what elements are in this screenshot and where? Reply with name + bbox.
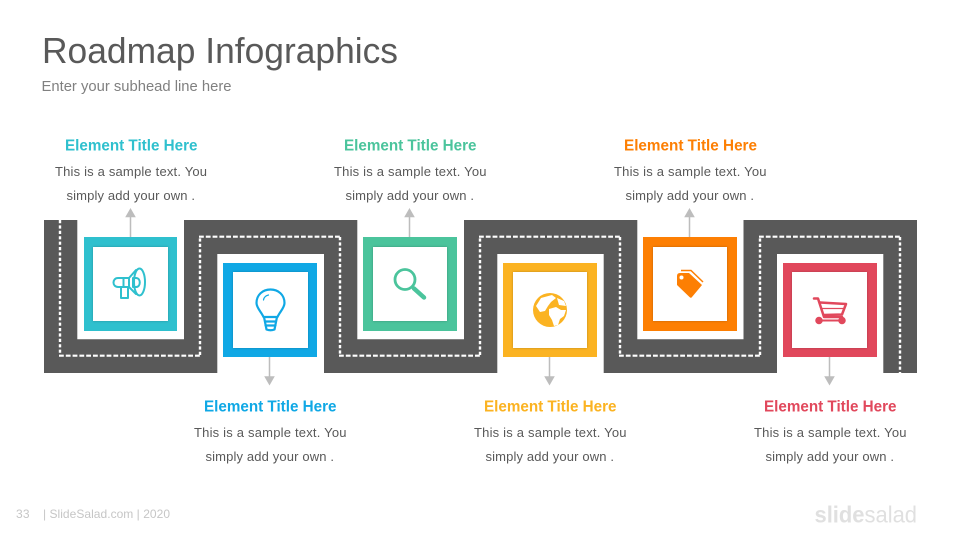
step 4: title: Element Title Here: [484, 398, 617, 416]
step 1: description: simply add your own .: [66, 188, 195, 203]
step 5: title: Element Title Here: [624, 138, 757, 154]
step 6: title: Element Title Here: [764, 398, 897, 416]
icon: price tag: [677, 270, 703, 298]
icon: globe: [533, 293, 567, 327]
icon: magnifying glass: [395, 270, 424, 298]
logo: slidesalad: slidesalad: [814, 502, 917, 528]
step 4: description: This is a sample text. You: [474, 425, 626, 440]
step 1: description: This is a sample text. You: [55, 164, 207, 179]
icon: light bulb: [256, 290, 284, 330]
step 3: description: This is a sample text. You: [334, 164, 486, 179]
roadmap road: [44, 220, 917, 373]
step 4: description: simply add your own .: [486, 449, 614, 464]
step 1: arrow up: [126, 210, 134, 237]
step 3: arrow up: [406, 210, 414, 237]
step 5: description: simply add your own .: [626, 188, 754, 203]
step 5: description: [614, 164, 766, 203]
step 3: description: [334, 164, 486, 203]
title: Roadmap Infographics: [42, 30, 398, 71]
step 2: blue square: [223, 263, 317, 357]
step 4: arrow down: [546, 357, 554, 384]
step 3: description: simply add your own .: [346, 188, 474, 203]
step 6: red square: [783, 263, 877, 357]
step 6: arrow down: [826, 357, 834, 384]
step 1: teal square: [84, 237, 177, 331]
footer: source: | SlideSalad.com | 2020: [43, 507, 170, 521]
step 6: description: This is a sample text. You: [754, 425, 906, 440]
step 5: arrow up: [686, 210, 694, 237]
icon: shopping cart: [814, 298, 846, 323]
step 1: title: Element Title Here: [65, 138, 198, 154]
step 5: description: This is a sample text. You: [614, 164, 766, 179]
step 4: yellow square: [503, 263, 597, 357]
step 3: title: Element Title Here: [344, 138, 477, 154]
step 6: description: [754, 425, 906, 464]
step 5: orange square: [643, 237, 737, 331]
footer: page number: 33: [16, 507, 30, 521]
step 4: description: [474, 425, 626, 464]
step 2: title: Element Title Here: [204, 398, 337, 416]
step 3: green square: [363, 237, 457, 331]
step 2: description: [194, 425, 346, 464]
step 6: description: simply add your own .: [766, 449, 894, 464]
step 1: description: [55, 164, 207, 203]
subhead: Enter your subhead line here: [42, 78, 232, 95]
step 2: arrow down: [266, 357, 274, 384]
step 2: description: simply add your own .: [206, 449, 334, 464]
step 2: description: This is a sample text. You: [194, 425, 346, 440]
icon: megaphone: [114, 268, 145, 298]
